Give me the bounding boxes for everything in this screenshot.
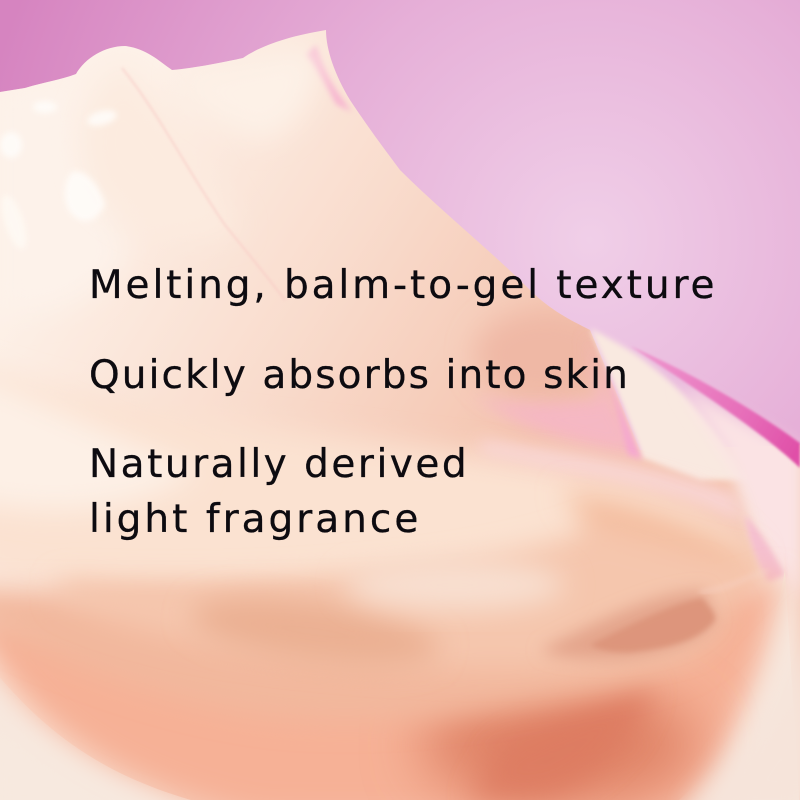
dark pocket <box>540 590 716 660</box>
left lobe light areas <box>4 77 66 92</box>
peach shade toward crease <box>474 308 597 394</box>
claim: fragrance: light fragrance <box>89 497 421 542</box>
lower orange bowl <box>0 570 800 800</box>
lower ridge <box>0 570 735 721</box>
pale highlight <box>345 559 565 611</box>
claim: texture: Melting, balm-to-gel texture <box>89 263 717 308</box>
upper peach ridge <box>60 525 760 670</box>
bottom right pale corner <box>690 610 800 800</box>
pocket lip <box>700 570 768 592</box>
pink rim <box>630 346 800 468</box>
pink shade along crease <box>496 370 626 454</box>
right pale area <box>680 466 800 797</box>
pink edge on top lobe <box>306 45 352 112</box>
gloss highlights <box>0 101 118 251</box>
pale pink seam above band <box>480 440 745 525</box>
frilled pink edge at right <box>745 515 785 582</box>
right pale pink shoulder <box>680 385 800 600</box>
bottom left pale corner <box>0 715 170 800</box>
claim: fragrance <box>89 442 469 542</box>
white lobe <box>590 328 750 480</box>
crease lines on upper lobes <box>122 68 274 286</box>
peach shade under band <box>560 490 760 622</box>
pink crescent under lobe <box>597 345 642 460</box>
cream band <box>0 365 755 628</box>
mid shade <box>187 585 443 679</box>
deep orange crease <box>470 680 650 800</box>
claim: fragrance: Naturally derived <box>89 442 469 487</box>
claim: absorption: Quickly absorbs into skin <box>89 353 630 398</box>
